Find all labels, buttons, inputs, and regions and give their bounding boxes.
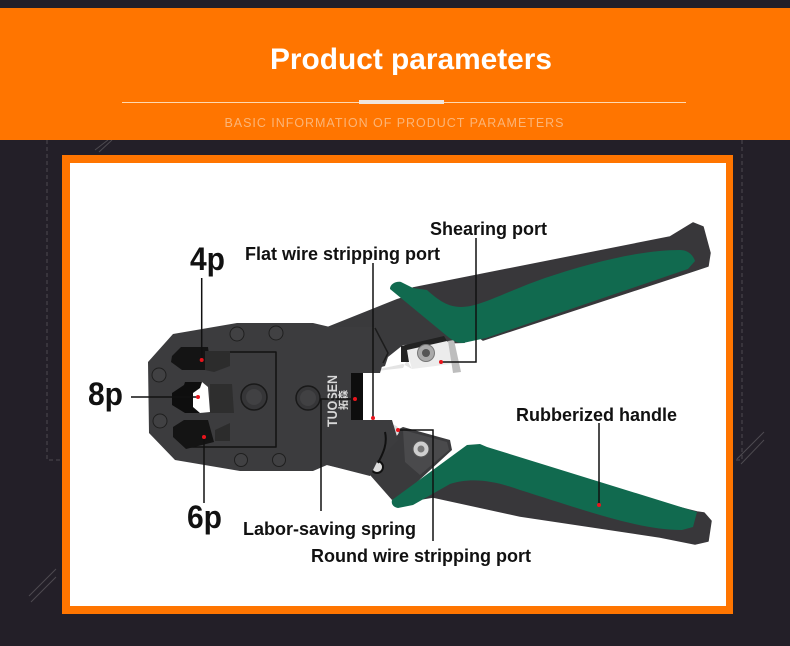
title: Product parameters bbox=[270, 43, 552, 76]
callout leaders bbox=[131, 238, 599, 541]
header divider bbox=[122, 100, 686, 104]
brand mark: TUOSEN bbox=[325, 375, 340, 427]
main pivot bbox=[296, 386, 320, 410]
upper handle green grip bbox=[390, 250, 695, 343]
label: 8p: 8p bbox=[88, 376, 123, 412]
label: round wire stripping port: Round wire stripping port bbox=[311, 546, 531, 566]
cutter pivot bbox=[371, 425, 449, 475]
lower jaw and arm bbox=[327, 420, 452, 500]
subtitle: BASIC INFORMATION OF PRODUCT PARAMETERS bbox=[224, 116, 564, 130]
rivets bbox=[152, 326, 286, 466]
port: 6p bbox=[173, 420, 214, 449]
callout labels bbox=[88, 219, 677, 566]
label: rubberized handle: Rubberized handle bbox=[516, 405, 677, 425]
label: labor-saving spring: Labor-saving spring bbox=[243, 519, 416, 539]
upper handle bbox=[413, 223, 710, 340]
icon: crimping tool bbox=[148, 223, 711, 544]
brand mark: 拓森 bbox=[337, 390, 350, 410]
callout dots bbox=[196, 358, 601, 507]
cutter blade bbox=[360, 336, 461, 373]
label: flat wire stripping port: Flat wire stripping port bbox=[245, 244, 440, 264]
lower handle bbox=[415, 455, 711, 544]
port: 8p bbox=[172, 382, 210, 413]
crimp die plate bbox=[190, 352, 276, 447]
label: shearing port: Shearing port bbox=[430, 219, 547, 239]
brand mark bbox=[325, 375, 350, 427]
tool head body bbox=[148, 323, 398, 476]
upper arm bbox=[327, 290, 465, 376]
lower handle green grip bbox=[392, 444, 697, 530]
port: 4p bbox=[171, 347, 211, 370]
label: 4p: 4p bbox=[190, 241, 225, 277]
label: 6p: 6p bbox=[187, 499, 222, 535]
die pivot bbox=[241, 384, 267, 410]
panel: product frame bbox=[62, 155, 733, 614]
header band bbox=[0, 8, 790, 140]
